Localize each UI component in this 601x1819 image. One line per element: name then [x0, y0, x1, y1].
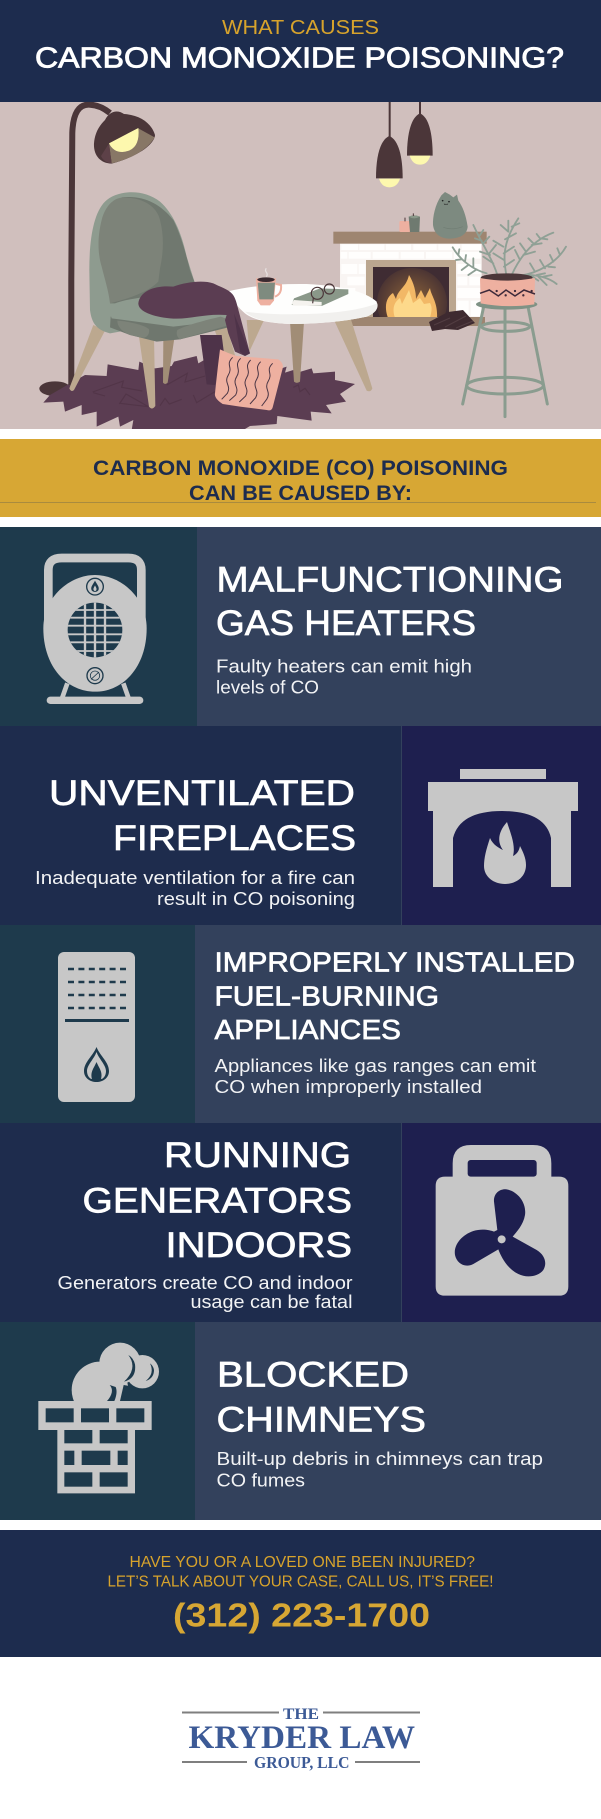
text block	[58, 1273, 353, 1312]
flower pot	[480, 273, 535, 306]
heading	[216, 1356, 426, 1440]
banner: caused by: CAN BE CAUSED BY:	[189, 482, 412, 505]
heading: FIREPLACES	[113, 819, 356, 858]
panel: blocked chimneys	[0, 1322, 601, 1520]
throw blanket	[138, 282, 250, 385]
panel: improperly installed appliances	[0, 925, 601, 1123]
heading: CHIMNEYS	[216, 1400, 426, 1440]
heading: IMPROPERLY INSTALLED	[214, 946, 575, 978]
chair legs	[69, 325, 238, 409]
heading: APPLIANCES	[214, 1014, 401, 1045]
illustration: living room scene	[0, 100, 601, 430]
fireplace	[333, 232, 487, 326]
phone number: (312) 223-1700	[173, 1596, 430, 1634]
hanging lamps	[376, 100, 433, 187]
text block	[216, 656, 472, 698]
icon: fireplace	[428, 769, 578, 887]
logo: the kryder law group: KRYDER LAW	[188, 1720, 415, 1756]
table legs	[247, 318, 372, 391]
text block	[214, 1056, 536, 1097]
text block	[216, 1449, 543, 1490]
panel: malfunctioning gas heaters	[0, 527, 601, 726]
plant fronds	[453, 218, 566, 285]
icon: gas heater	[43, 558, 147, 704]
heading: MALFUNCTIONING	[216, 560, 564, 600]
cat	[433, 192, 468, 239]
stool	[463, 308, 547, 417]
call to action text: HAVE YOU OR A LOVED ONE BEEN INJURED?	[130, 1554, 475, 1571]
text block: Generators create CO and indoor	[58, 1273, 353, 1293]
lamp shade	[94, 112, 155, 164]
text block: Appliances like gas ranges can emit	[214, 1056, 536, 1076]
text block: CO fumes	[216, 1470, 305, 1490]
call to action text: LET’S TALK ABOUT YOUR CASE, CALL US, IT’S FREE!	[108, 1574, 494, 1590]
candles	[399, 213, 420, 232]
glasses	[311, 284, 334, 303]
call to action text	[108, 1554, 494, 1590]
logo: the kryder law group: GROUP, LLC	[254, 1753, 350, 1772]
text block: Inadequate ventilation for a fire can	[35, 868, 355, 888]
call to action footer	[0, 1530, 601, 1657]
heading: UNVENTILATED	[49, 774, 355, 813]
heading: INDOORS	[166, 1226, 352, 1265]
text block: CO when improperly installed	[214, 1077, 482, 1097]
logo: the kryder law group	[182, 1706, 420, 1772]
text block: Built-up debris in chimneys can trap	[216, 1449, 543, 1469]
logs	[429, 310, 475, 331]
header banner	[0, 0, 601, 102]
panel: running generators indoors	[0, 1123, 601, 1322]
pillow	[215, 349, 283, 410]
heading: GENERATORS	[82, 1182, 352, 1220]
heading: FUEL-BURNING	[214, 980, 439, 1012]
heading: GAS HEATERS	[216, 604, 476, 643]
text block	[35, 868, 355, 909]
coffee table top	[227, 268, 378, 324]
banner: caused by: CARBON MONOXIDE (CO) POISONING	[93, 457, 508, 480]
text block: result in CO poisoning	[157, 889, 355, 909]
chair seat	[110, 297, 233, 342]
logo: the kryder law group: THE	[283, 1706, 319, 1723]
book	[292, 288, 348, 306]
heading: what causes: WHAT CAUSES	[222, 16, 379, 39]
cat and candles on mantel	[399, 192, 468, 239]
chair back	[89, 192, 203, 333]
icon: chimney	[38, 1343, 159, 1493]
banner: caused by	[0, 439, 601, 517]
heading: RUNNING	[164, 1136, 351, 1175]
title: CARBON MONOXIDE POISONING?	[35, 42, 564, 74]
heading	[49, 774, 356, 858]
heading	[82, 1136, 352, 1265]
heading	[214, 946, 575, 1045]
stool and potted plant	[453, 218, 566, 417]
icon: generator	[436, 1145, 568, 1296]
text block: levels of CO	[216, 678, 319, 698]
text block: Faulty heaters can emit high	[216, 656, 472, 676]
heading	[216, 560, 564, 643]
heading: BLOCKED	[217, 1356, 409, 1394]
mug	[256, 268, 281, 305]
panel: unventilated fireplaces	[0, 726, 601, 925]
text block: usage can be fatal	[190, 1292, 352, 1312]
icon: fuel-burning appliance	[58, 952, 135, 1102]
rug	[39, 356, 355, 430]
floor lamp	[71, 105, 155, 385]
flames	[386, 275, 437, 318]
armchair	[69, 192, 238, 409]
